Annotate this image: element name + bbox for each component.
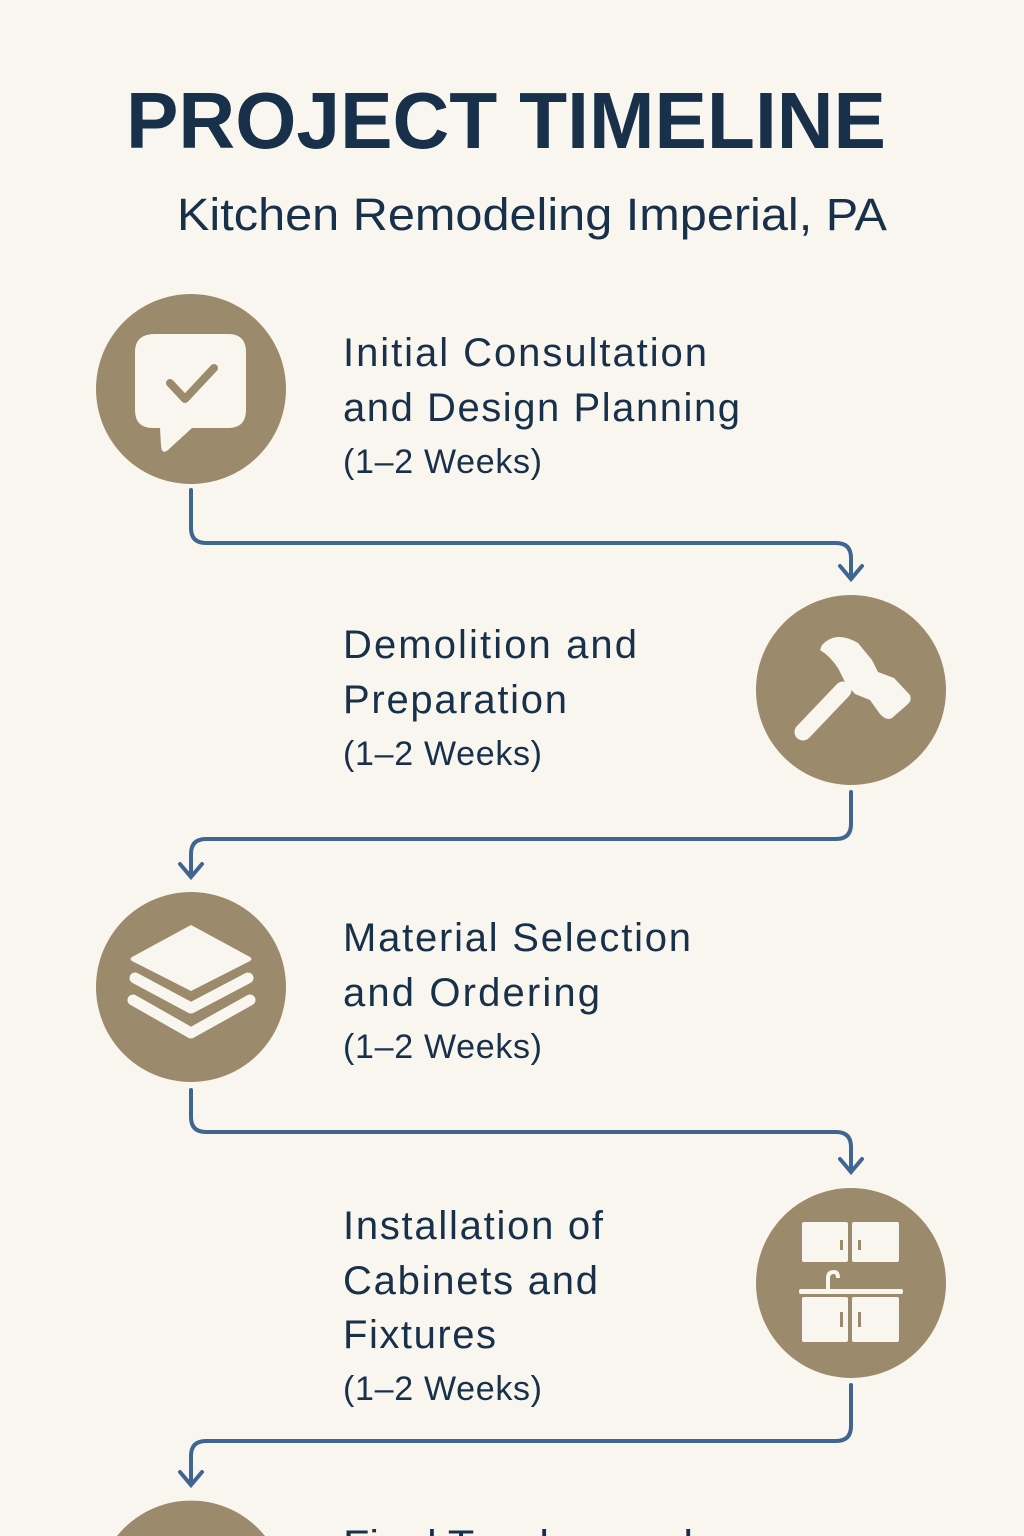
subtitle: Kitchen Remodeling Imperial, PA (177, 189, 887, 240)
icon: cabinets (756, 1188, 946, 1378)
text: step 4: Fixtures (343, 1313, 496, 1357)
text: step 2: Demolition and (343, 623, 637, 667)
icon: layers (96, 892, 286, 1082)
text: step 1: and Design Planning (343, 386, 740, 430)
arrow 3 to 4 (191, 1090, 862, 1172)
text: step 4: Installation of (343, 1204, 604, 1248)
title: PROJECT TIMELINE (126, 76, 886, 165)
arrow 1 to 2 (191, 490, 862, 579)
text: step 3: Material Selection (343, 916, 691, 960)
text: step 1: (1–2 Weeks) (343, 443, 542, 481)
arrow 4 to 5 (180, 1385, 851, 1485)
step 2: demolition (343, 595, 946, 785)
step 1: consultation (96, 294, 740, 484)
text: step 4: (1–2 Weeks) (343, 1370, 542, 1408)
text: step 2: (1–2 Weeks) (343, 735, 542, 773)
step 3: materials (96, 892, 691, 1082)
text: step 3: and Ordering (343, 971, 600, 1015)
text: step 1: Initial Consultation (343, 331, 707, 375)
arrow 2 to 3 (180, 792, 851, 877)
icon: hammer (756, 595, 946, 785)
step 4: installation (343, 1188, 946, 1408)
text: step 3: (1–2 Weeks) (343, 1028, 542, 1066)
step 5: final touches (cut off) (117, 1501, 693, 1536)
text: step 2: Preparation (343, 678, 567, 722)
icon: step 5 circle (117, 1501, 265, 1536)
text: step 4: Cabinets and (343, 1259, 598, 1303)
icon: speech bubble with check (96, 294, 286, 484)
